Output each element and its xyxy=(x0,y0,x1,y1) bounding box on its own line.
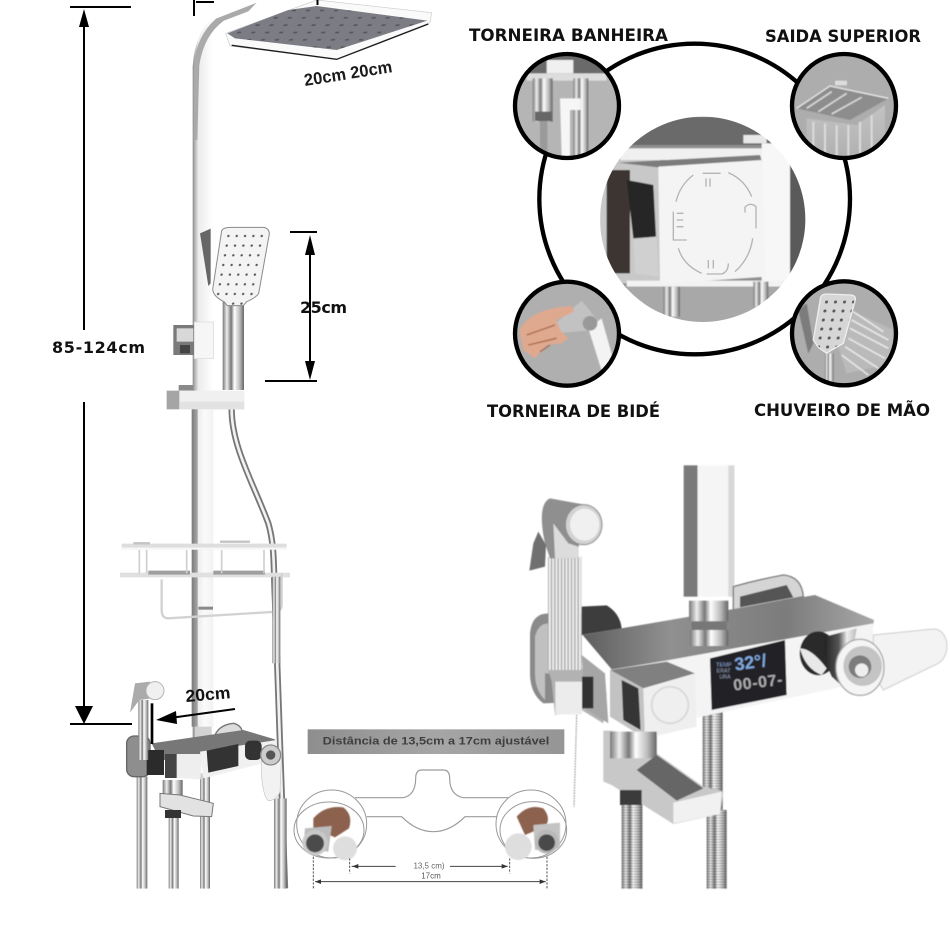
display: ERAT xyxy=(717,669,731,675)
label: saida superior: SAIDA SUPERIOR xyxy=(765,27,921,47)
height label: 85-124cm xyxy=(52,338,145,357)
bidet sprayer xyxy=(130,682,164,760)
column band xyxy=(198,607,213,610)
back bracket inner xyxy=(740,585,793,607)
hand shower label: 25cm xyxy=(300,298,347,317)
wall clip xyxy=(173,322,214,359)
shelf xyxy=(120,542,290,618)
back bracket right xyxy=(733,575,803,610)
center photo: diverter xyxy=(600,117,807,323)
label: torneira banheira: TORNEIRA BANHEIRA xyxy=(469,26,669,46)
column bend shading xyxy=(194,3,257,140)
back bracket xyxy=(213,723,243,740)
bidet sprayer xyxy=(529,498,602,670)
mixer close-up product photo xyxy=(529,465,947,889)
main riser column xyxy=(193,0,302,740)
hose cut strip xyxy=(0,889,467,895)
display: 00-07- xyxy=(732,672,783,695)
lever handle xyxy=(873,629,947,690)
hose from hand shower xyxy=(232,409,285,888)
display: 32°/ xyxy=(733,650,768,675)
measures xyxy=(313,857,547,888)
plate inner xyxy=(535,623,550,700)
features circle diagram xyxy=(515,44,896,387)
lever xyxy=(245,741,282,801)
label: chuveiro de mao: CHUVEIRO DE MÃO xyxy=(754,398,930,421)
display: TEMP xyxy=(716,663,732,669)
banner xyxy=(308,729,564,754)
small circle: bidet sprayer xyxy=(515,282,620,387)
body front face xyxy=(610,623,873,727)
bidet mount block xyxy=(548,655,608,723)
bracket outline xyxy=(355,770,508,832)
temperature knob xyxy=(800,628,857,690)
spout xyxy=(160,780,213,818)
dashed guide line xyxy=(574,715,577,807)
lower column xyxy=(192,409,213,727)
hoses xyxy=(137,577,287,889)
square riser xyxy=(684,465,734,597)
hoses xyxy=(622,712,727,889)
small circle: top rain shower xyxy=(792,54,896,160)
small circle: bathtub faucet xyxy=(515,53,620,160)
right fitting xyxy=(496,790,567,860)
lower section: shelf, mixer, hoses xyxy=(0,409,467,895)
banner: Distância de 13,5cm a 17cm ajustável xyxy=(323,736,549,748)
connecting ring xyxy=(539,44,850,354)
dimension: 20cm 20cm: 20cm 20cm xyxy=(303,57,394,90)
measures: 13,5 cm) xyxy=(413,861,445,870)
mixer width arrow xyxy=(156,709,235,724)
diverter dial icons xyxy=(673,173,756,274)
label: torneira de bide: TORNEIRA DE BIDÉ xyxy=(487,400,660,422)
cube diverter xyxy=(610,662,697,738)
dial xyxy=(836,639,884,695)
wall plate xyxy=(530,613,582,703)
rain shower head xyxy=(226,0,432,59)
hand shower dimension arrow xyxy=(265,231,317,382)
wall plate xyxy=(127,736,150,777)
shower connector xyxy=(195,727,212,743)
mixer width label: 20cm xyxy=(185,683,231,706)
body top surface xyxy=(583,595,874,669)
hand shower xyxy=(213,227,269,390)
small circle: hand shower xyxy=(792,281,896,385)
width dimension mark: top xyxy=(194,0,318,16)
back bracket left xyxy=(582,605,622,635)
full shower column product xyxy=(0,0,467,895)
wall bracket diagram xyxy=(294,729,567,888)
spout xyxy=(603,731,723,824)
display xyxy=(710,640,787,710)
riser connector xyxy=(689,601,728,646)
wedge holder xyxy=(200,229,211,286)
display: URA xyxy=(719,675,731,681)
left fitting xyxy=(294,790,367,860)
height dimension arrow xyxy=(70,6,132,725)
mixer body xyxy=(147,730,277,779)
slider holder xyxy=(167,385,244,409)
measures: 17cm xyxy=(421,872,441,881)
